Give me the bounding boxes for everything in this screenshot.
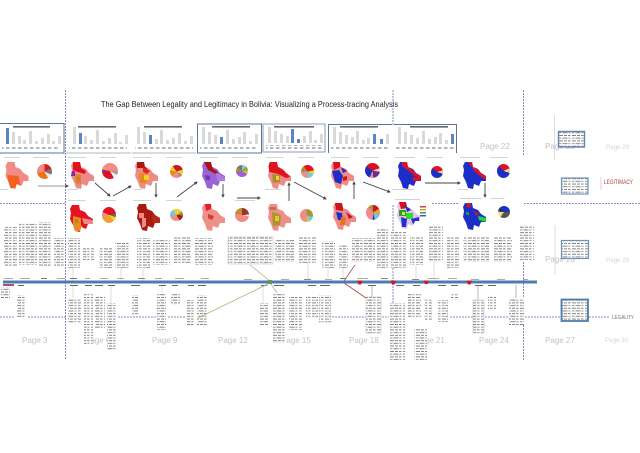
pie 13 xyxy=(366,205,380,220)
map 7 xyxy=(398,162,421,189)
page labels: Page 26 xyxy=(545,255,575,264)
title: The Gap Between Legality and Legitimacy in Bolivia: Visualizing a Process-tracing Analysis xyxy=(101,99,398,109)
dashed framework lines xyxy=(0,90,640,360)
page labels xyxy=(22,142,630,345)
page labels: Page 15 xyxy=(281,336,311,345)
map 5 xyxy=(268,162,291,189)
start marker xyxy=(3,284,14,286)
bar chart 5 xyxy=(263,124,325,152)
pie 12 xyxy=(300,209,313,222)
boxed text blocks below timeline xyxy=(366,297,484,333)
pie 6 xyxy=(365,163,380,178)
pie 10 xyxy=(170,209,183,221)
page labels: Page 12 xyxy=(218,336,248,345)
timeline markers xyxy=(268,280,472,284)
axis label: legality: LEGALITY xyxy=(612,315,634,321)
olive connector lines xyxy=(198,265,277,318)
map 3 xyxy=(135,162,158,189)
pie 3 xyxy=(170,165,183,178)
map 12 xyxy=(268,204,291,231)
page labels: Page 29 xyxy=(606,144,630,151)
page labels: Page 22 xyxy=(480,142,510,151)
page labels: Page 30 xyxy=(605,337,629,344)
page labels: Page 27 xyxy=(545,336,575,345)
map 2 xyxy=(71,162,94,189)
red connector lines xyxy=(344,265,366,298)
framed text box legitimacy xyxy=(562,178,588,194)
pie 11 xyxy=(235,208,249,222)
map 1 xyxy=(6,162,28,189)
timeline date labels xyxy=(4,278,528,286)
bar chart 4 xyxy=(198,124,262,153)
page labels: Page 24 xyxy=(479,336,509,345)
map row 1: legitimacy maps xyxy=(6,162,486,189)
map 6 xyxy=(331,162,354,189)
pie 2 xyxy=(102,163,118,179)
timeline xyxy=(3,280,537,286)
arrows between maps xyxy=(38,182,485,201)
framed text box middle right xyxy=(562,240,588,258)
boxed callout above timeline xyxy=(228,237,273,264)
bar chart 1 xyxy=(0,124,64,153)
pie 8 xyxy=(497,164,510,178)
bar chart 3 xyxy=(132,126,196,153)
map row 2: legality maps xyxy=(70,202,486,232)
map 11 xyxy=(202,204,225,231)
map captions xyxy=(0,157,508,201)
page labels: Page 6 xyxy=(85,336,111,345)
thin grey guide lines xyxy=(73,115,601,303)
map 14 xyxy=(397,202,420,229)
pie 1 xyxy=(37,164,52,179)
framed text box legality xyxy=(562,300,588,321)
page labels: Page 18 xyxy=(349,336,379,345)
map 14 legend xyxy=(420,206,426,216)
map 8 xyxy=(463,162,486,189)
page labels: Page 9 xyxy=(152,336,178,345)
map 15 xyxy=(463,203,486,230)
map 13 xyxy=(333,203,356,230)
bar chart 7 xyxy=(394,124,456,153)
pie 4 xyxy=(236,165,248,177)
text blocks below timeline xyxy=(1,287,524,360)
page labels: Page 3 xyxy=(22,336,48,345)
text blocks above timeline xyxy=(4,222,534,268)
map 10 xyxy=(137,204,160,231)
bar chart 6 xyxy=(328,124,392,153)
map 9 xyxy=(70,205,93,232)
map 4 xyxy=(202,162,225,189)
pie 5 xyxy=(301,165,314,178)
pie 15 xyxy=(498,206,510,218)
page labels: Page 21 xyxy=(415,336,445,345)
pie 9 xyxy=(102,207,116,223)
page labels: Page 29 xyxy=(606,257,630,264)
page labels: Page 25 xyxy=(545,142,575,151)
bar chart 2 xyxy=(66,126,131,153)
framed text box top right xyxy=(558,132,584,147)
pie 7 xyxy=(431,166,443,178)
